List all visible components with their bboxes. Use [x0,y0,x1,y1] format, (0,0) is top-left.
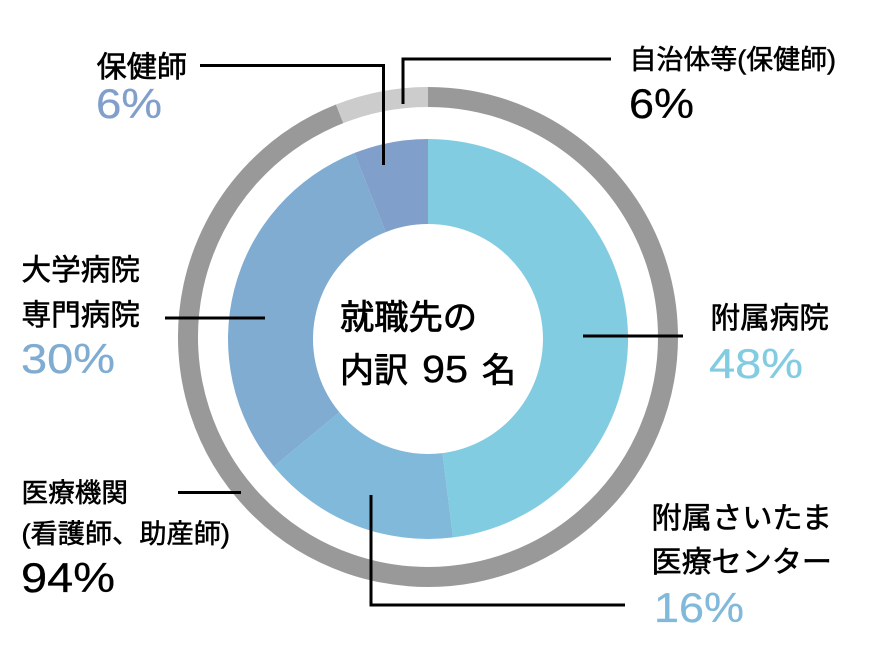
center title [340,299,516,391]
center title: 内訳 [340,352,408,390]
leader line: local government [403,59,611,104]
label: public health nurse 6%: 保健師 [96,51,187,84]
label: affiliated hospital 48% [709,302,829,387]
label: affiliated hospital 48%: 48% [709,340,803,387]
donut segment: Saitama center 16% [274,412,453,539]
leader line: university hospitals [165,316,265,320]
label: affiliated Saitama medical center 16%: 16% [654,584,744,631]
ring segment: medical institutions 94% [188,97,668,577]
leader line: Saitama center [371,495,625,605]
donut segment: university hospitals 30% [228,153,386,466]
label: local government 6%: 6% [629,80,694,127]
leader line: public health nurse [200,66,384,165]
label: university and specialty hospitals 30%: 専門病院 [22,299,140,332]
donut segment: affiliated hospital 48% [428,139,628,537]
label: medical institutions 94%: 94% [21,554,115,601]
label: affiliated Saitama medical center 16%: 附属さいたま [652,502,832,535]
leader line: affiliated hospital [583,334,683,338]
label: affiliated hospital 48%: 附属病院 [710,302,829,335]
label: public health nurse 6%: 6% [96,80,162,127]
label: university and specialty hospitals 30%: 大学病院 [22,254,140,287]
center title: 名 [482,352,516,390]
label: university and specialty hospitals 30% [21,254,140,382]
label: affiliated Saitama medical center 16% [652,502,832,631]
donut segment: public health nurse 6% [354,139,428,232]
label: local government 6% [629,45,836,127]
label: medical institutions 94% [21,478,230,601]
center title: 就職先の [340,299,477,337]
label: medical institutions 94%: (看護師、助産師) [22,519,230,549]
outer ring chart [188,97,668,577]
label: medical institutions 94%: 医療機関 [22,478,128,508]
leader line: medical institutions [178,491,241,494]
ring segment: local government 6% [340,97,428,114]
center title: 95 [422,349,468,391]
label: local government 6%: 自治体等(保健師) [630,45,836,75]
label: university and specialty hospitals 30%: 30% [21,335,115,382]
label: public health nurse 6% [96,51,187,127]
inner donut chart [228,139,628,539]
label: affiliated Saitama medical center 16%: 医療センター [652,546,832,579]
